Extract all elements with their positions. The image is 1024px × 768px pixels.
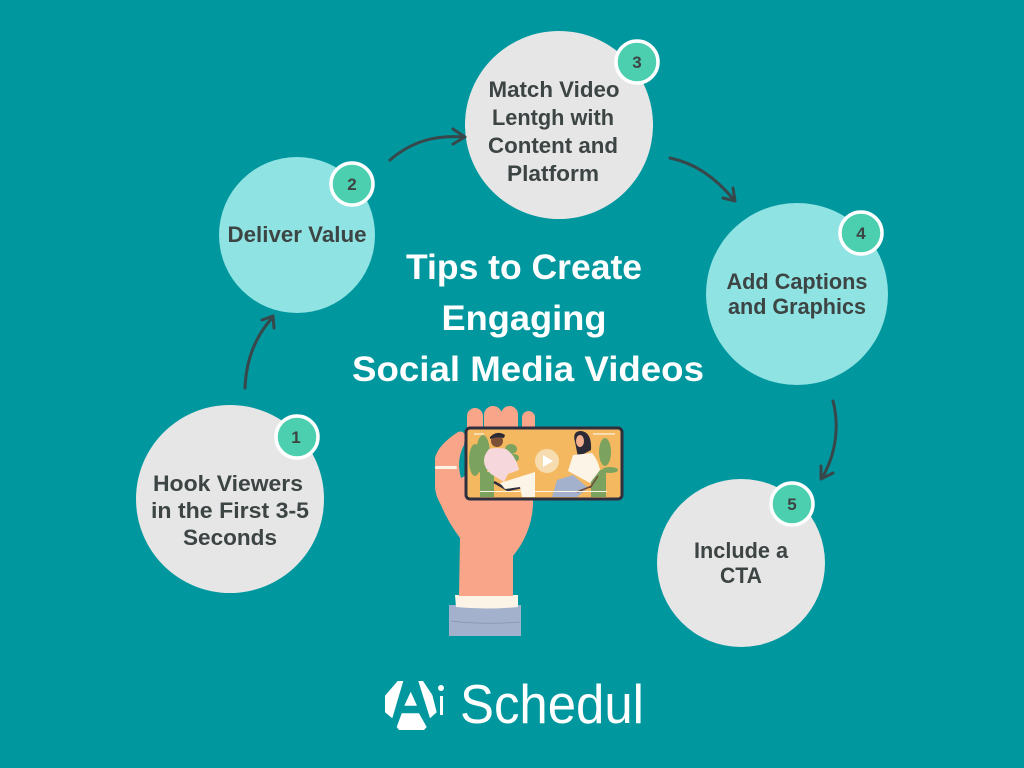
step 4: add captions: Add Captions bbox=[726, 269, 868, 294]
logo wordmark: Schedul bbox=[460, 673, 644, 735]
step 3: match video length: Match Video bbox=[488, 77, 620, 102]
step 3: match video length: 3 bbox=[632, 53, 642, 72]
step 4: add captions: and Graphics bbox=[728, 294, 866, 319]
step 1: hook viewers: Hook Viewers bbox=[153, 471, 303, 496]
icon: ring bbox=[435, 466, 457, 469]
step 5: include a CTA: 5 bbox=[787, 495, 797, 514]
step 2: deliver value: Deliver Value bbox=[228, 222, 366, 247]
illustration: hand holding phone bbox=[435, 406, 622, 636]
icon: sleeve and cuff bbox=[449, 595, 521, 636]
step 1: hook viewers bbox=[136, 405, 324, 593]
arrow: step 2 to step 3 bbox=[390, 129, 465, 160]
step 5: include a CTA bbox=[657, 479, 825, 647]
arrow: step 3 to step 4 bbox=[670, 158, 735, 201]
step 3: match video length bbox=[465, 31, 658, 219]
title: Social Media Videos bbox=[352, 350, 704, 389]
step 4: add captions bbox=[706, 203, 888, 385]
step 5: include a CTA: Include a bbox=[694, 538, 789, 563]
step 2: deliver value bbox=[219, 157, 375, 313]
arrow: step 1 to step 2 bbox=[245, 316, 274, 388]
step 3: match video length: Content and bbox=[488, 133, 618, 158]
step 3: match video length: Platform bbox=[507, 161, 599, 186]
title bbox=[352, 248, 704, 389]
step 2: deliver value: 2 bbox=[347, 175, 357, 194]
step 1: hook viewers: 1 bbox=[291, 428, 301, 447]
step 1: hook viewers: Seconds bbox=[183, 525, 277, 550]
title: Engaging bbox=[442, 299, 606, 338]
step 4: add captions: 4 bbox=[856, 224, 866, 243]
icon: hand bbox=[435, 406, 535, 596]
icon: A mark bbox=[385, 681, 444, 730]
logo: Ai Schedul bbox=[385, 673, 644, 735]
arrow: step 4 to step 5 bbox=[821, 401, 836, 479]
step 1: hook viewers: in the First 3-5 bbox=[151, 498, 309, 523]
title: Tips to Create bbox=[406, 248, 642, 287]
icon: phone bbox=[466, 428, 622, 499]
step 3: match video length: Lentgh with bbox=[492, 105, 614, 130]
step 5: include a CTA: CTA bbox=[720, 563, 762, 588]
